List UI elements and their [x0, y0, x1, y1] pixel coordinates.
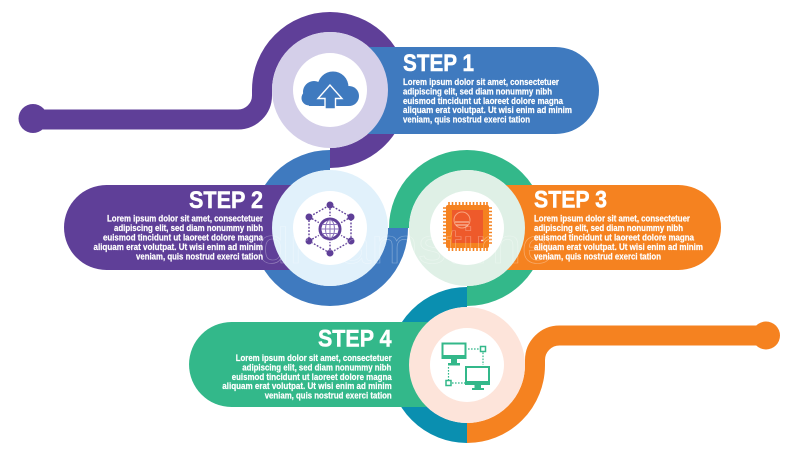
step 3 body text: aliquam erat volutpat. Ut wisi enim ad minim [534, 242, 703, 252]
step 1 heading: STEP 1 [403, 50, 474, 77]
watermark: dreamstime [258, 218, 553, 274]
step 4 banner [189, 322, 440, 407]
panel: step 4 [189, 297, 780, 433]
step 2 banner [64, 185, 320, 270]
step 2 body text: aliquam erat volutpat. Ut wisi enim ad minim [94, 242, 263, 252]
step 3 heading: STEP 3 [534, 187, 607, 214]
step 4 body text: adipiscing elit, sed diam nonummy nibh [242, 362, 391, 372]
step 1 body text: euismod tincidunt ut laoreet dolore magna [403, 96, 563, 106]
step 2 body text: adipiscing elit, sed diam nonummy nibh [114, 223, 263, 233]
step 4 body text [222, 353, 392, 400]
step 1 banner [340, 47, 599, 134]
step 3 body text: Lorem ipsum dolor sit amet, consectetuer [534, 214, 691, 224]
step 4 body text: veniam, quis nostrud exerci tation [265, 390, 392, 400]
step 2 circle [272, 170, 388, 286]
step 3 body text: veniam, quis nostrud exerci tation [534, 251, 661, 261]
purple connector line [18, 22, 398, 158]
blue connector arc [262, 160, 398, 296]
icon: connected computers [442, 344, 490, 390]
step 4 body text: euismod tincidunt ut laoreet dolore magna [232, 372, 392, 382]
step 4 heading: STEP 4 [318, 326, 392, 352]
step 3 circle [409, 170, 525, 286]
step 3 body text [534, 214, 703, 261]
step 1 circle [272, 32, 388, 148]
step 4 circle [409, 307, 525, 423]
icon: global network [306, 202, 354, 256]
step 4 body text: Lorem ipsum dolor sit amet, consectetuer [236, 353, 392, 363]
orange connector line [467, 322, 780, 433]
step 1 body text: veniam, quis nostrud exerci tation [403, 114, 530, 124]
step 2 heading: STEP 2 [189, 187, 263, 214]
green connector arc [399, 160, 535, 296]
step 3 body text: adipiscing elit, sed diam nonummy nibh [534, 223, 683, 233]
step 3 body text: euismod tincidunt ut laoreet dolore magna [534, 232, 694, 242]
panel: step 3 [399, 160, 721, 296]
panel: step 2 [64, 160, 398, 296]
step 4 body text: aliquam erat volutpat. Ut wisi enim ad minim [222, 381, 392, 391]
icon: processor chip [443, 202, 492, 251]
step 2 body text: euismod tincidunt ut laoreet dolore magna [103, 232, 263, 242]
step 1 body text [403, 77, 572, 124]
step 2 body text: Lorem ipsum dolor sit amet, consectetuer [107, 214, 264, 224]
step 2 body text: veniam, quis nostrud exerci tation [136, 251, 263, 261]
step 2 body text [94, 214, 264, 261]
panel: step 1 [18, 22, 599, 158]
step 1 body text: adipiscing elit, sed diam nonummy nibh [403, 86, 552, 96]
step 3 banner [490, 185, 721, 270]
step 1 body text: aliquam erat volutpat. Ut wisi enim ad minim [403, 105, 572, 115]
teal connector arc [399, 297, 467, 433]
icon: cloud upload [302, 72, 359, 109]
step 1 body text: Lorem ipsum dolor sit amet, consectetuer [403, 77, 560, 87]
